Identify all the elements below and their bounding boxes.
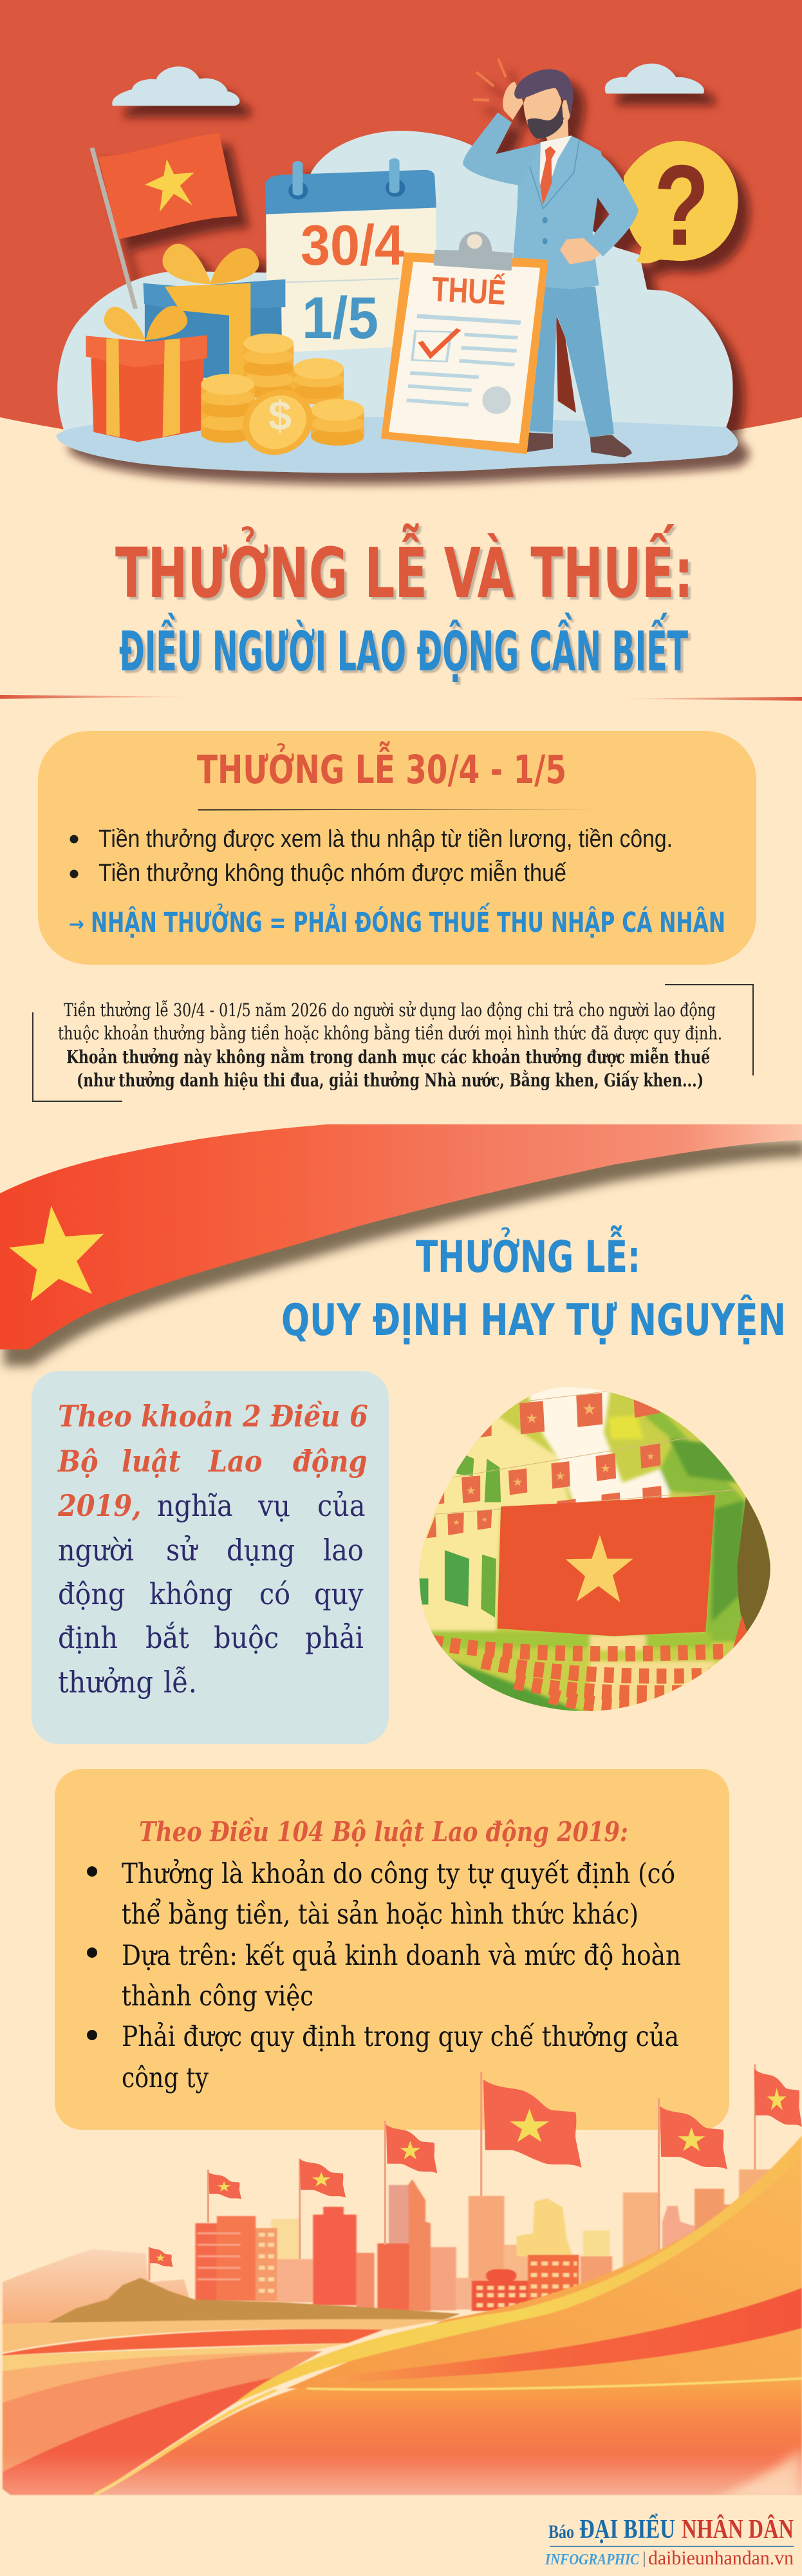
illustration: city skyline with flags xyxy=(3,2064,802,2498)
article 6 text: định xyxy=(58,1620,118,1655)
icon: calendar: 30/4 xyxy=(301,213,404,277)
tree band xyxy=(48,2278,460,2323)
article 6 text: 6 xyxy=(350,1399,368,1434)
icon: clipboard: THUẾ xyxy=(431,270,507,312)
article 6 text: 2 xyxy=(242,1399,261,1434)
website: daibieunhandan.vn xyxy=(648,2546,794,2569)
article 6 text: Theo xyxy=(58,1399,132,1434)
article 6 text: người xyxy=(58,1533,134,1567)
article 6 text: Lao xyxy=(208,1444,263,1479)
section heading xyxy=(281,1225,786,1346)
panel heading: Theo Điều 104 Bộ luật Lao động 2019: xyxy=(139,1816,628,1848)
bullet list: Tiền thưởng được xem là thu nhập từ tiền lương, tiền công. xyxy=(98,826,673,853)
panel heading: THƯỞNG LỄ 30/4 - 1/5 xyxy=(197,741,566,793)
article 6 text: buộc xyxy=(214,1620,279,1655)
flag hanging xyxy=(498,1495,715,1636)
explanatory note: Tiền thưởng lễ 30/4 - 01/5 năm 2026 do người sử dụng lao động chi trả cho người lao động xyxy=(64,999,716,1021)
ground ellipse xyxy=(56,417,738,473)
icon: blue gift xyxy=(143,244,285,378)
flowing ribbons xyxy=(3,2136,802,2498)
article 6 text: sử xyxy=(166,1533,198,1567)
article 6 text: luật xyxy=(122,1444,181,1479)
footer logo xyxy=(545,2513,794,2569)
red header background xyxy=(0,0,802,454)
article 6 text: khoản xyxy=(141,1399,233,1434)
brick bunting xyxy=(433,1643,727,1706)
article 6 text: phải xyxy=(305,1620,364,1655)
panel: labour code article 6 xyxy=(32,1371,389,1744)
article 6 text: vụ xyxy=(257,1488,290,1523)
explanatory note: (như thưởng danh hiệu thi đua, giải thưởng Nhà nước, Bằng khen, Giấy khen...) xyxy=(77,1070,704,1091)
section heading: THƯỞNG LỄ: xyxy=(416,1225,640,1283)
bullet list: thể bằng tiền, tài sản hoặc hình thức khác) xyxy=(122,1899,639,1931)
newspaper name: Báo xyxy=(548,2521,574,2543)
haze hills xyxy=(3,2249,194,2325)
newspaper name xyxy=(548,2513,794,2544)
explanatory note: thuộc khoản thưởng bằng tiền hoặc không bằng tiền dưới mọi hình thức đã được quy định. xyxy=(58,1023,722,1044)
article 6 text: của xyxy=(317,1488,366,1523)
article 6 text: Bộ xyxy=(57,1444,98,1479)
icon: ribbon star xyxy=(9,1206,104,1302)
red ribbon banner xyxy=(0,1124,802,1349)
icon: clipboard xyxy=(381,231,548,454)
article 6 text: nghĩa xyxy=(157,1488,233,1523)
newspaper name: ĐẠI BIỂU xyxy=(579,2513,675,2544)
bullet list: công ty xyxy=(122,2062,209,2094)
icon: Vietnamese flag xyxy=(98,133,238,239)
article 6 text: Điều xyxy=(270,1399,340,1434)
skyline buildings xyxy=(196,2170,775,2313)
article 6 text: lễ. xyxy=(163,1665,197,1700)
icon: coin stacks: $ xyxy=(268,392,292,439)
article 6 text: quy xyxy=(314,1577,364,1611)
panel: labour code article 104 xyxy=(55,1769,729,2130)
article 6 text: bắt xyxy=(145,1620,189,1655)
bullet list xyxy=(87,1858,681,2094)
explanatory note: Khoản thưởng này không nằm trong danh mục các khoản thưởng được miễn thuế xyxy=(66,1046,711,1068)
icon: right cloud xyxy=(605,64,704,93)
article 6 text: thưởng xyxy=(58,1665,153,1700)
icon: calendar: 1/5 xyxy=(302,285,378,351)
bullet list: Thưởng là khoản do công ty tự quyết định (có xyxy=(122,1858,675,1890)
article 6 text: có xyxy=(259,1577,290,1611)
article 6 text: 2019, xyxy=(57,1488,142,1523)
icon: question bubble xyxy=(624,141,738,269)
article 6 text: dụng xyxy=(227,1533,295,1567)
big cloud backdrop xyxy=(57,131,733,433)
icon: flag pole xyxy=(92,148,136,309)
icon: question bubble: ? xyxy=(654,141,709,269)
hero illustration xyxy=(56,59,738,473)
bullet list xyxy=(70,826,673,887)
icon: calendar xyxy=(265,162,438,352)
article 6 text: không xyxy=(149,1577,233,1611)
figure: confused man xyxy=(463,59,639,457)
conclusion line: → xyxy=(69,913,84,936)
explanatory note xyxy=(58,999,722,1091)
bullet list: Dựa trên: kết quả kinh doanh và mức độ hoàn xyxy=(122,1940,681,1972)
article 6 text: lao xyxy=(323,1533,364,1567)
flags on poles xyxy=(149,2064,802,2280)
title xyxy=(115,523,693,684)
flag bunting xyxy=(427,1393,662,1538)
bullet list: Phải được quy định trong quy chế thưởng của xyxy=(122,2021,679,2053)
bullet list: thành công việc xyxy=(122,1980,313,2012)
illustration: flag egg xyxy=(419,1387,770,1712)
bullet list: Tiền thưởng không thuộc nhóm được miễn thuế xyxy=(98,859,566,887)
article 6 text xyxy=(57,1399,368,1700)
article 6 text: động xyxy=(58,1577,126,1611)
icon: left cloud xyxy=(112,66,239,106)
article 6 text: động xyxy=(293,1444,368,1479)
infographic tag: INFOGRAPHIC xyxy=(545,2552,640,2568)
icon: red gift xyxy=(86,306,207,442)
panel: holiday bonus xyxy=(38,731,756,965)
icon: coin stacks xyxy=(201,334,364,458)
